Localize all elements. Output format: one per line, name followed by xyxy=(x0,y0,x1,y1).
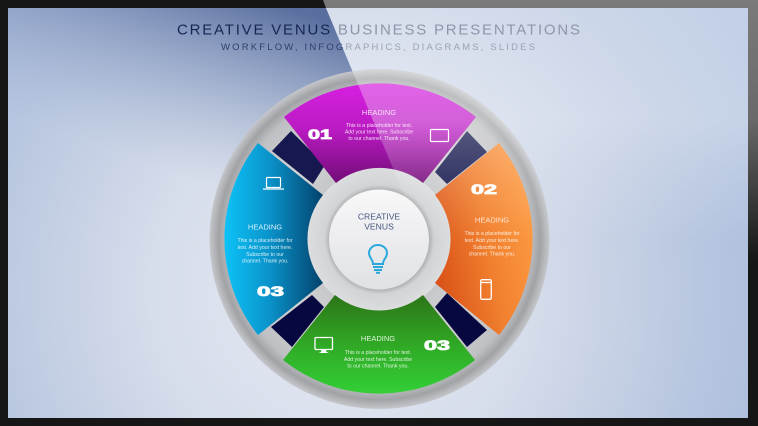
title: CREATIVE VENUS BUSINESS PRESENTATIONS xyxy=(177,22,580,38)
panel: magenta segment 01 xyxy=(284,83,476,183)
blue body text xyxy=(237,238,293,264)
blue heading: HEADING xyxy=(248,222,282,232)
magenta heading: HEADING xyxy=(362,108,396,117)
panel: orange segment 02 xyxy=(435,143,533,335)
green heading: HEADING xyxy=(361,334,395,343)
blue body text: Subscribe to our xyxy=(246,252,284,258)
subtitle: WORKFLOW, INFOGRAPHICS, DIAGRAMS, SLIDES xyxy=(221,42,535,53)
panel: green segment 03 xyxy=(283,295,475,394)
number 03: 03 xyxy=(257,283,284,299)
number 03: 03 xyxy=(424,337,450,353)
orange body text: This is a placeholder for xyxy=(464,231,520,237)
icon: laptop xyxy=(263,178,284,189)
orange body text: Subscribe to our xyxy=(473,245,511,251)
center label: CREATIVE xyxy=(358,212,400,222)
number 01: 01 xyxy=(308,126,332,142)
dark connector bars xyxy=(271,131,487,347)
green body text: Add your text here. Subscribe xyxy=(344,357,412,363)
orange heading: HEADING xyxy=(475,216,509,224)
center label xyxy=(358,212,400,232)
blue body text: channel. Thank you. xyxy=(242,258,288,264)
blue body text: text. Add your text here. xyxy=(238,245,292,251)
glossy light overlay xyxy=(326,8,748,240)
orange body text xyxy=(464,231,520,258)
blue body text: This is a placeholder for xyxy=(237,238,293,244)
icon: monitor xyxy=(315,338,332,353)
icon: light bulb xyxy=(369,245,387,273)
panel: blue segment 03 xyxy=(224,143,323,335)
magenta body text xyxy=(345,123,413,142)
magenta body text: This is a placeholder for text. xyxy=(346,123,412,129)
magenta body text: to our channel. Thank you. xyxy=(348,136,410,142)
orange body text: channel. Thank you. xyxy=(469,252,515,258)
magenta body text: Add your text here. Subscribe xyxy=(345,130,413,136)
green body text: This is a placeholder for text. xyxy=(345,350,411,356)
orange body text: text. Add your text here. xyxy=(465,238,519,244)
lit frame edge xyxy=(323,0,758,260)
icon: tablet xyxy=(430,130,448,142)
green body text xyxy=(344,350,412,370)
green body text: to our channel. Thank you. xyxy=(347,364,409,370)
center circle xyxy=(329,190,429,290)
center label: VENUS xyxy=(364,222,394,232)
outer ring xyxy=(210,69,550,409)
icon: phone xyxy=(481,280,491,299)
hub ring xyxy=(308,168,452,312)
number 02: 02 xyxy=(471,181,497,197)
